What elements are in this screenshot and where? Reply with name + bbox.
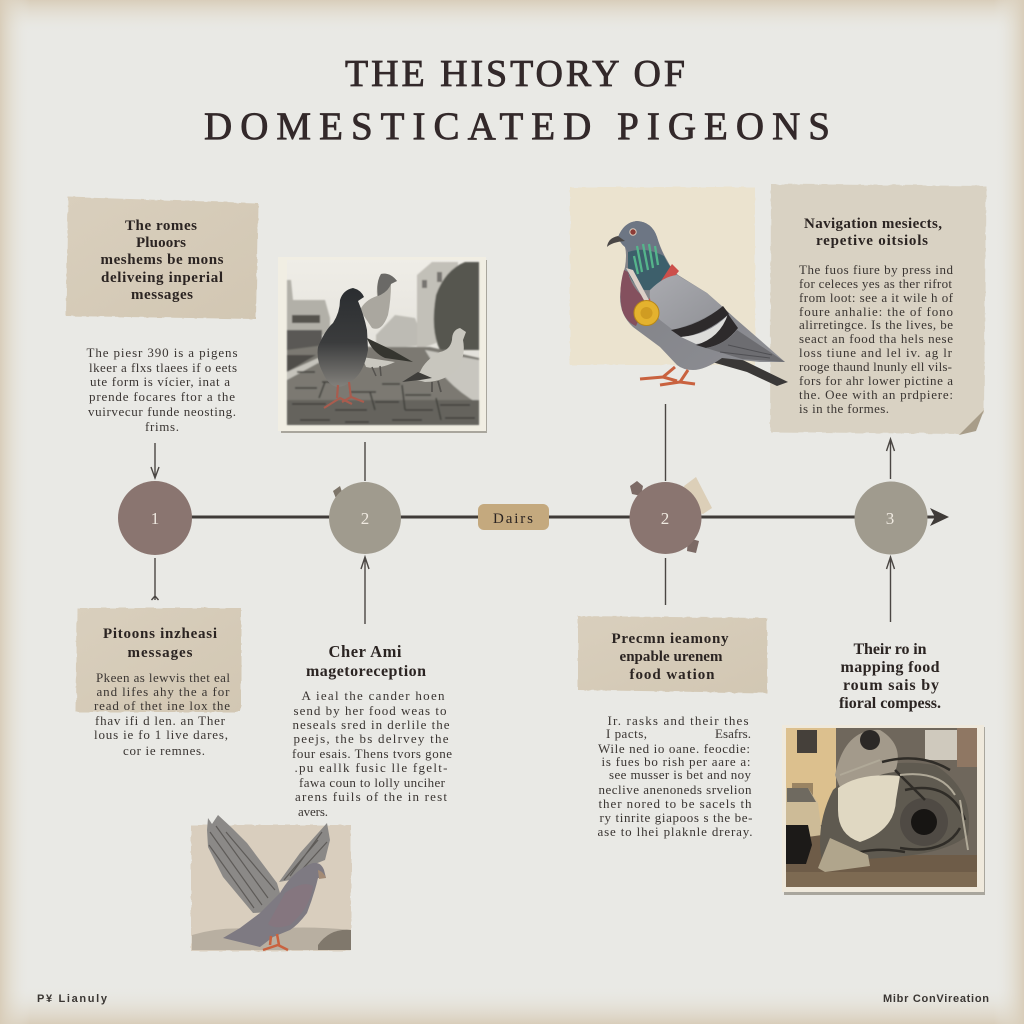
text block: third era xyxy=(598,713,752,839)
panel: navigation: for celeces yes as ther rifrot xyxy=(799,276,952,291)
heading: mapping food: Their ro in xyxy=(854,641,927,658)
timeline node 4 xyxy=(854,482,928,554)
text block: first era xyxy=(86,345,238,434)
timeline node 2: 2 xyxy=(361,509,369,528)
card: cream backdrop xyxy=(570,187,755,365)
medal ribbon xyxy=(626,268,650,302)
text block: Cher Ami: send by her food weas to xyxy=(294,703,446,718)
text block: Cher Ami: Cher Ami xyxy=(328,642,402,661)
text block: third era: Ir. rasks and their thes xyxy=(608,713,748,728)
text block: third era: I pacts, xyxy=(606,726,647,741)
pigeon body xyxy=(618,221,785,370)
text block: third era: neclive anenoneds srvelion xyxy=(598,782,752,797)
timeline node 1 xyxy=(118,481,192,555)
title: DOMESTICATED PIGEONS xyxy=(204,105,830,148)
wing bars xyxy=(671,306,729,337)
panel: pigeons messages: cor ie remnes. xyxy=(123,743,205,758)
pigeon wing xyxy=(650,275,723,330)
text block: third era: is fues bo rish per aare a: xyxy=(602,754,750,769)
text block: Cher Ami: .pu eallk fusic lle fgelt- xyxy=(294,760,448,775)
photo: pigeon in flight xyxy=(191,815,351,951)
panel: imperial messages: Pluoors xyxy=(136,235,186,251)
panel: navigation: rooge thaund lnunly ell vils- xyxy=(799,359,952,374)
panel: imperial messages: The romes xyxy=(125,218,197,234)
panel: pigeons messages: messages xyxy=(128,645,193,661)
title xyxy=(204,53,830,148)
panel: navigation: alirretingce. Is the lives, be xyxy=(799,317,953,332)
beak xyxy=(607,236,625,247)
heading: mapping food: mapping food xyxy=(840,659,940,676)
panel: pigeons messages: Pitoons inzheasi xyxy=(103,626,217,642)
text block: third era: see musser is bet and noy xyxy=(609,767,752,782)
panel: navigation: from loot: see a it wile h of xyxy=(799,290,954,305)
date tag xyxy=(478,504,549,530)
panel: imperial messages: deliveing inperial xyxy=(101,270,223,286)
timeline node 1: 1 xyxy=(151,509,159,528)
text block: Cher Ami: neseals sred in derlile the xyxy=(292,717,450,732)
text block: third era: ase to lhei plaknle dreray. xyxy=(598,824,752,839)
pigeon breast xyxy=(620,270,648,326)
illustration: pigeon with medal xyxy=(607,221,788,386)
timeline node 2 xyxy=(329,482,401,554)
panel: food navigation xyxy=(578,616,767,693)
text block: first era: vuirvecur funde neosting. xyxy=(88,404,236,419)
text block: Cher Ami: magetoreception xyxy=(306,663,426,680)
pigeon iridescent neck xyxy=(628,250,676,290)
panel: pigeons messages: Pkeen as lewvis thet eal xyxy=(96,670,230,685)
timeline node 3 with torn tape: 2 xyxy=(661,509,669,528)
panel: navigation: fors for ahr lower pictine a xyxy=(799,373,953,388)
feet xyxy=(640,367,695,385)
text block: third era: Esafrs. xyxy=(715,726,751,741)
text block: Cher Ami: arens fuils of the in rest xyxy=(295,789,447,804)
text block: Cher Ami: fawa coun to lolly unciher xyxy=(299,775,446,790)
photo: pigeons on a city street xyxy=(278,257,487,433)
timeline node 3 with torn tape xyxy=(630,477,712,554)
panel: imperial messages: messages xyxy=(131,287,193,303)
heading: mapping food xyxy=(839,641,941,712)
text block: Cher Ami: avers. xyxy=(298,804,328,819)
text block: first era: frims. xyxy=(145,419,179,434)
text block: Cher Ami: four esais. Thens tvors gone xyxy=(292,746,452,761)
text block: third era: ther nored to be sacels th xyxy=(598,796,752,811)
heading: mapping food: roum sais by xyxy=(843,677,939,694)
panel: navigation xyxy=(770,184,986,435)
text block: Cher Ami: A ieal the cander hoen xyxy=(302,688,445,703)
text block: first era: The piesr 390 is a pigens xyxy=(86,345,238,360)
pigeon in flight figure xyxy=(207,815,330,950)
panel: navigation: seact an food tha hels nese xyxy=(799,331,953,346)
footer left credit: P¥ Lianuly xyxy=(37,993,108,1005)
panel: navigation: is in the formes. xyxy=(799,401,889,416)
panel: food navigation: Precmn ieamony xyxy=(612,631,729,647)
text block: Cher Ami xyxy=(292,642,452,819)
panel: navigation: repetive oitsiols xyxy=(816,233,928,249)
heading: mapping food: fioral compess. xyxy=(839,695,941,712)
panel: pigeons messages: and lifes ahy the a for xyxy=(96,684,230,699)
text block: first era: ute form is vícier, inat a xyxy=(90,374,230,389)
panel: imperial messages xyxy=(66,197,258,319)
wing feathers xyxy=(706,330,785,362)
panel: pigeons messages: fhav ifi d len. an Ther xyxy=(95,713,226,728)
panel: navigation: Navigation mesiects, xyxy=(804,216,942,232)
panel: navigation: loss tiune and lel iv. ag lr xyxy=(799,345,953,360)
panel: pigeons messages: lous ie fo 1 live dares, xyxy=(94,727,228,742)
panel: navigation: foure anhalie: the of fono xyxy=(799,304,953,319)
panel: pigeons messages xyxy=(76,608,241,758)
text block: first era: lkeer a flxs tlaees if o eets xyxy=(89,360,237,375)
gold medal xyxy=(634,300,659,326)
panel: food navigation: food wation xyxy=(630,667,715,683)
timeline axis with end arrow xyxy=(190,508,949,526)
text block: third era: ry tinrite giapoos s the be- xyxy=(600,810,752,825)
connector arrows xyxy=(151,404,894,624)
panel: imperial messages: meshems be mons xyxy=(100,252,224,268)
title: THE HISTORY OF xyxy=(345,53,685,95)
panel: pigeons messages: read of thet ine lox the xyxy=(94,698,230,713)
footer right credit: Mibr ConVireation xyxy=(883,993,989,1005)
photo: pigeon loft wreck xyxy=(782,725,985,895)
panel: navigation: the. Oee with an prdpiere: xyxy=(799,387,953,402)
date tag: Dairs xyxy=(493,511,533,527)
pigeon tail xyxy=(712,345,788,386)
text block: third era: Wile ned io oane. feocdie: xyxy=(598,741,750,756)
text block: Cher Ami: peejs, the bs delrvey the xyxy=(294,731,449,746)
pigeon head xyxy=(618,221,664,258)
panel: navigation: The fuos fiure by press ind xyxy=(799,262,954,277)
text block: first era: prende focares ftor a the xyxy=(89,389,235,404)
timeline node 4: 3 xyxy=(886,509,894,528)
panel: food navigation: enpable urenem xyxy=(620,649,723,665)
